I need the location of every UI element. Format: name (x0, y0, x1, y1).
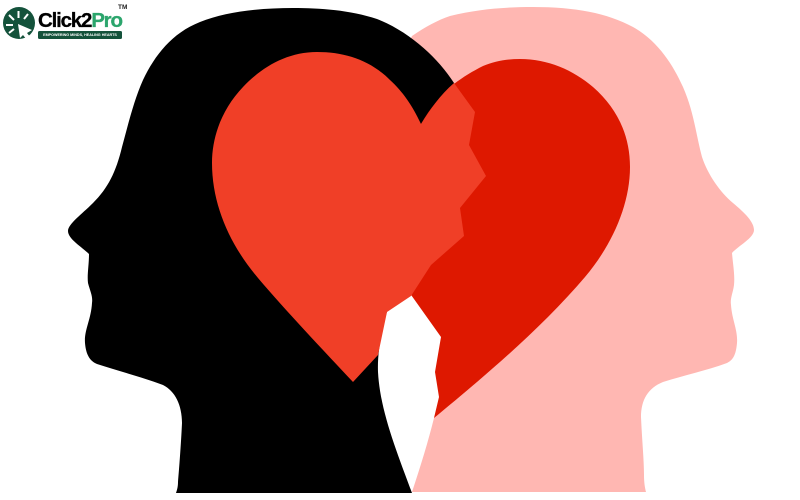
right half of broken heart (409, 59, 630, 418)
black head silhouette facing left (68, 8, 470, 493)
logo tagline badge: EMPOWERING MINDS, HEALING HEARTS (43, 33, 117, 37)
logo icon: green circle with cursor (3, 7, 35, 39)
logo wordmark: Click2Pro (38, 9, 122, 32)
pink head silhouette facing right (400, 7, 754, 492)
logo: Click2Pro (3, 4, 127, 39)
logo tagline badge (38, 31, 122, 39)
trademark mark: TM (118, 4, 127, 11)
left half of broken heart (212, 52, 486, 382)
